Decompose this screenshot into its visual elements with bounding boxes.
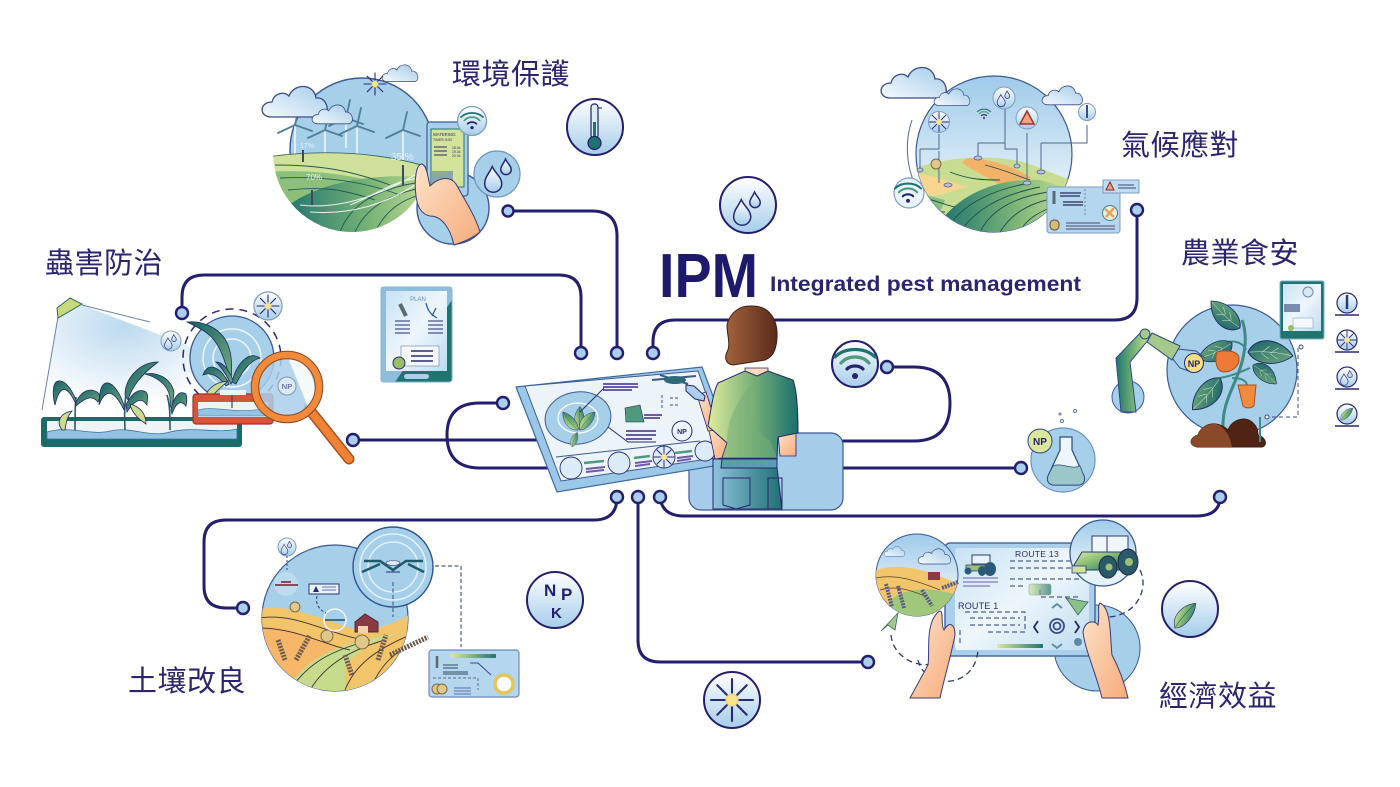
icon: drop badge	[278, 538, 296, 570]
icon: leaf	[1162, 581, 1218, 637]
icon: drone circle	[353, 527, 433, 617]
icon: hand holding phone: WATERING:	[433, 132, 456, 137]
connector: pest control	[182, 275, 581, 353]
route tablet: ROUTE 13	[1015, 549, 1059, 559]
heading: economic benefit: 經濟效益	[1159, 680, 1277, 713]
robot arm	[1112, 329, 1205, 413]
hands	[910, 603, 1128, 698]
connector: soil	[204, 497, 617, 608]
icon: wifi badge	[894, 178, 924, 208]
icon: water drops badge	[474, 151, 520, 197]
route tablet	[945, 543, 1095, 656]
icon: sun badge	[928, 112, 950, 132]
big circle behind tablet	[1054, 605, 1140, 691]
dashboard NPK badge: NP	[677, 429, 687, 436]
icon: flask with NP badge	[1028, 410, 1095, 492]
small warning card	[1103, 180, 1139, 193]
sensor tablet	[1280, 281, 1324, 339]
connector: magnifier	[353, 438, 560, 442]
icon: hand holding phone: 18.04	[452, 146, 461, 150]
illustration: wind farm: 70%	[306, 173, 322, 182]
person	[686, 306, 798, 509]
panel: environmental protection	[260, 58, 623, 245]
icon: NPK: N	[544, 581, 556, 600]
illustration: hydroponic tray with plants	[41, 362, 242, 447]
icon: thermometer badge	[1078, 104, 1096, 120]
icon: paper plane	[881, 613, 898, 631]
desk	[689, 433, 843, 510]
icon: NPK: K	[551, 605, 562, 622]
connector nodes	[176, 204, 1226, 668]
icon: wifi badge	[458, 106, 486, 136]
icon: drop badge	[161, 331, 181, 351]
panel: soil improvement	[128, 527, 519, 700]
icon: hand holding phone: 19.04	[452, 150, 461, 154]
connector: farm route	[638, 497, 868, 662]
illustration: lamp and light beam	[42, 298, 205, 412]
dashed link	[435, 566, 461, 647]
title: IPM: IPM	[659, 242, 758, 311]
panel: agricultural food safety	[1112, 237, 1359, 447]
heading: soil improvement: 土壤改良	[128, 665, 246, 698]
icon: magnifying glass: NP	[282, 382, 292, 391]
data card	[429, 650, 519, 697]
data card	[1047, 187, 1120, 233]
dashboard NPK badge	[672, 421, 692, 441]
icon: hand holding phone: 20.04	[452, 154, 461, 158]
heading: pest control: 蟲害防治	[45, 247, 163, 280]
connector: flask	[800, 466, 1021, 470]
farm circle	[876, 534, 960, 620]
illustration: wind farm: 35 %	[391, 152, 414, 163]
heading: environmental protection: 環境保護	[452, 58, 570, 91]
illustration: wind farm: 17%	[300, 143, 314, 150]
icon: plan tablet: PLAN	[410, 297, 426, 303]
heading: climate response: 氣候應對	[1121, 129, 1239, 162]
title: IPM	[659, 242, 1081, 311]
connector: wifi	[800, 367, 950, 441]
illustration: scanned plant circle	[183, 309, 281, 407]
heading: agricultural food safety: 農業食安	[1181, 237, 1299, 270]
connector lines	[182, 211, 1220, 662]
small tractor	[964, 555, 996, 576]
dashboard bottom icons	[560, 441, 715, 479]
illustration: pepper plant	[1167, 295, 1303, 447]
icon: sun	[704, 672, 760, 728]
icon: warning badge	[1016, 107, 1038, 129]
illustration: red tray	[193, 390, 273, 424]
illustration: wind farm	[262, 64, 429, 232]
connector: economics	[660, 497, 1220, 516]
icon: NPK	[527, 572, 583, 628]
tractor circle	[1070, 520, 1138, 586]
icon column	[1335, 293, 1359, 426]
icon: NPK: P	[561, 585, 572, 604]
tablet dashboard	[516, 367, 738, 492]
route tablet: ROUTE 1	[958, 601, 998, 611]
icon: wifi	[832, 341, 878, 387]
panel: economic benefit	[876, 520, 1277, 713]
dashboard target plant	[542, 388, 614, 448]
icon: flask with NP badge: NP	[1033, 437, 1047, 448]
icon: drop badge	[993, 87, 1015, 109]
illustration: monitored fields	[881, 67, 1087, 240]
icon: hand holding phone	[415, 122, 489, 245]
icon: water drops	[720, 177, 776, 233]
robot arm: NP	[1188, 359, 1200, 369]
panel: climate response	[881, 67, 1239, 240]
connector: left loop	[447, 403, 560, 468]
illustration: wheat field	[255, 545, 428, 700]
icon: hand holding phone: TIMER: 8:00	[433, 138, 452, 142]
panel: central dashboard and operator	[516, 306, 843, 510]
icon: sun badge	[254, 292, 282, 320]
icon: thermometer	[567, 99, 623, 155]
title: IPM: Integrated pest management	[770, 273, 1081, 296]
icon: plan tablet	[381, 287, 452, 382]
icon: magnifying glass	[255, 355, 349, 459]
connector: environment	[508, 211, 617, 353]
dashed routes and paper planes	[891, 570, 1143, 681]
connector: climate	[653, 211, 1137, 353]
panel: pest control	[41, 247, 452, 459]
